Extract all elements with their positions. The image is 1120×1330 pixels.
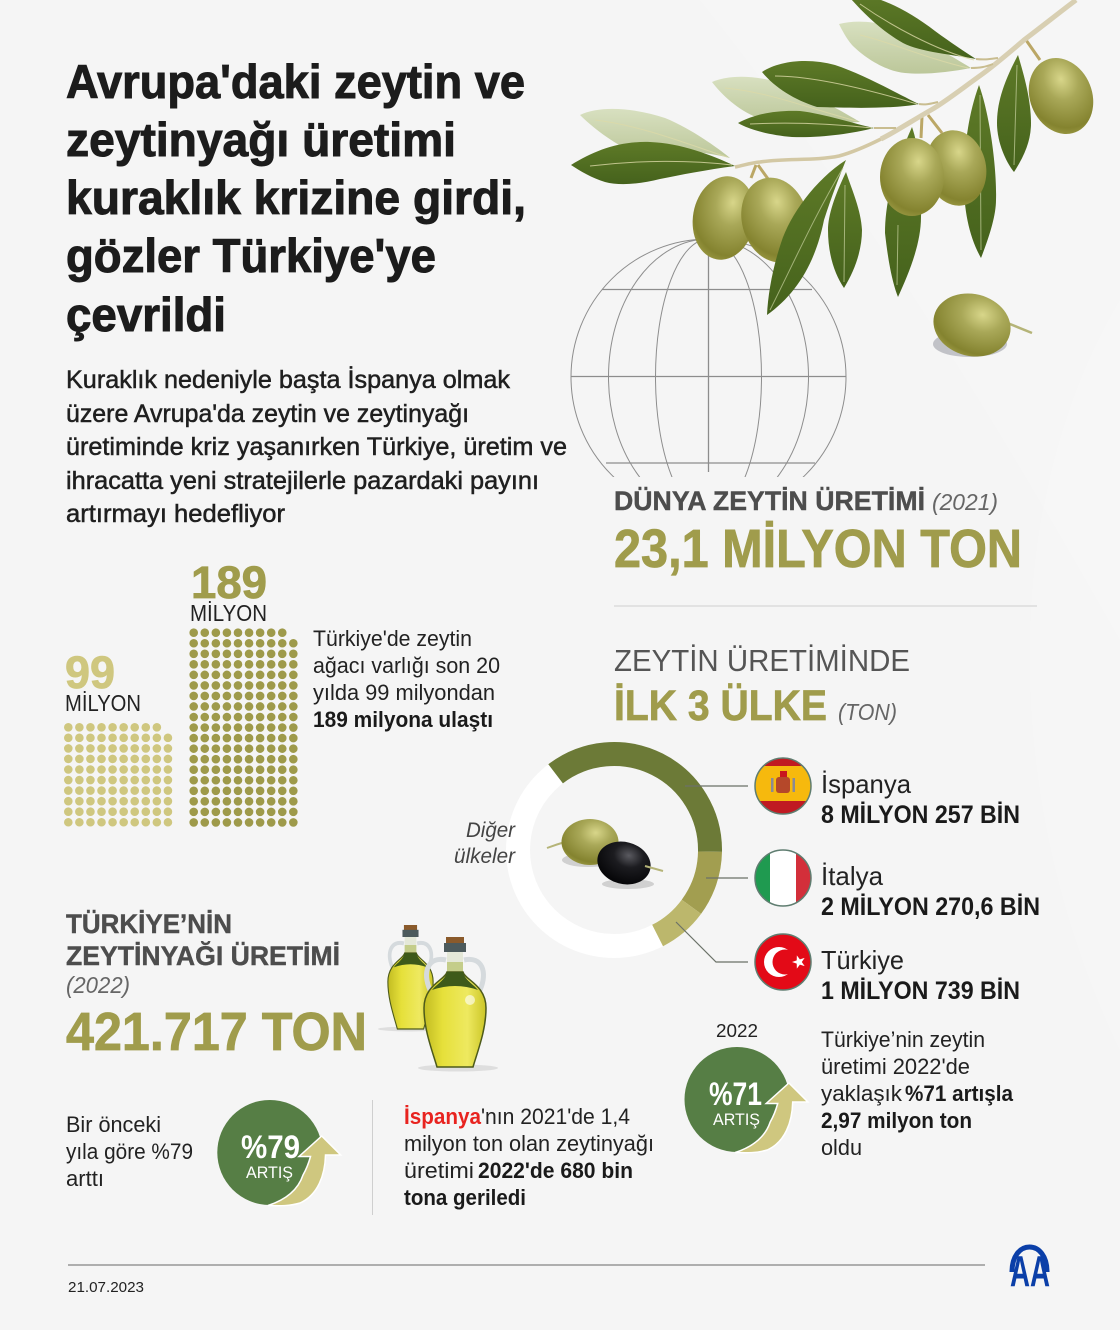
flag: Turkey — [755, 934, 811, 990]
189 million: MİLYON — [190, 600, 267, 626]
stem — [881, 0, 1076, 139]
Spain text: üretimi — [404, 1158, 474, 1183]
country values: 2 MİLYON 270,6 BİN — [821, 893, 1040, 921]
front leaves — [767, 160, 846, 315]
Turkey olive oil production: ZEYTİNYAĞI ÜRETİMİ — [66, 940, 340, 971]
oil increase text: yıla göre %79 — [66, 1139, 193, 1164]
country values: 1 MİLYON 739 BİN — [821, 977, 1020, 1005]
country values: İspanya — [821, 769, 912, 799]
Spain text: 2022'de 680 bin — [478, 1158, 633, 1183]
leaf top dark — [845, 0, 976, 59]
oil increase text: Bir önceki — [66, 1112, 161, 1137]
badge: 79 percent increase: ARTIŞ — [246, 1163, 293, 1182]
intro text: artırmayı hedefliyor — [66, 500, 285, 528]
olive branch illustration — [571, 0, 1104, 315]
badge: 79 percent increase: %79 — [241, 1129, 300, 1165]
2022 production text — [821, 1027, 1014, 1160]
country values — [821, 769, 1040, 1005]
tree count text: Türkiye'de zeytin — [313, 626, 472, 651]
99 million — [65, 647, 168, 822]
Spain text — [404, 1104, 654, 1210]
tree count text: yılda 99 milyondan — [313, 680, 495, 705]
badge: 71 percent increase — [684, 1021, 808, 1153]
segment: Spain — [556, 754, 710, 852]
leader lines — [676, 786, 748, 962]
title: Avrupa'daki zeytin ve — [66, 55, 525, 108]
date: 21.07.2023 — [68, 1279, 144, 1296]
world production: (2021) — [932, 489, 998, 515]
99 million: 99 — [65, 647, 115, 698]
top 3 countries heading: ZEYTİN ÜRETİMİNDE — [614, 643, 910, 678]
2022 production text: oldu — [821, 1135, 862, 1160]
leaf top light — [839, 22, 971, 74]
country values: Türkiye — [821, 945, 904, 975]
loose olive — [927, 285, 1032, 365]
leaf light middle — [712, 77, 860, 123]
2022 production text: %71 artışla — [905, 1081, 1014, 1106]
intro text: üretiminde kriz yaşanırken Türkiye, üretim ve — [66, 433, 567, 461]
globe wireframe — [570, 239, 846, 477]
world production: 23,1 MİLYON TON — [614, 519, 1022, 579]
Turkey olive oil production: 421.717 TON — [66, 1002, 367, 1062]
Turkey olive oil production: (2022) — [66, 972, 130, 998]
title: kuraklık krizine girdi, — [66, 171, 526, 224]
leaf midribs — [590, 4, 974, 166]
other countries label: Diğer — [466, 819, 516, 842]
back bottle — [388, 925, 433, 1029]
front bottle — [424, 937, 486, 1067]
Spain text: İspanya — [404, 1104, 482, 1129]
leaf dark middle — [762, 61, 919, 108]
logo: AA — [1010, 1247, 1050, 1296]
badge: 79 percent increase — [217, 1100, 341, 1206]
leaf left dark — [571, 142, 735, 184]
tree count text — [313, 626, 500, 732]
other countries label — [454, 819, 516, 868]
oil increase text: arttı — [66, 1166, 104, 1191]
oil increase text — [66, 1112, 193, 1191]
segment: Turkey — [658, 907, 691, 936]
top 3 countries heading: İLK 3 ÜLKE — [614, 682, 827, 730]
icon: olive oil bottles — [378, 925, 498, 1072]
country values: İtalya — [821, 861, 884, 891]
189 million — [190, 557, 294, 822]
Turkey olive oil production — [66, 909, 367, 1062]
top 3 countries heading — [614, 643, 910, 730]
Spain text: milyon ton olan zeytinyağı — [404, 1131, 654, 1156]
tree count text: 189 milyona ulaştı — [313, 707, 493, 732]
flag: Spain — [755, 758, 811, 814]
top 3 countries heading: (TON) — [838, 699, 897, 725]
leaf left light — [580, 109, 730, 158]
other countries label: ülkeler — [454, 845, 516, 868]
intro text — [66, 365, 567, 528]
logo: AA: AA — [1010, 1247, 1050, 1296]
title — [66, 55, 526, 341]
Spain text: tona geriledi — [404, 1185, 526, 1210]
country values: 8 MİLYON 257 BİN — [821, 801, 1020, 829]
intro text: Kuraklık nedeniyle başta İspanya olmak — [66, 365, 510, 394]
title: zeytinyağı üretimi — [66, 113, 456, 166]
flag: Italy — [755, 850, 811, 906]
99 million: MİLYON — [65, 690, 141, 716]
world production — [614, 486, 1022, 579]
olives on branch — [686, 171, 762, 265]
badge: 71 percent increase: %71 — [709, 1076, 762, 1112]
leaves behind olives — [885, 127, 921, 297]
donut center olives — [547, 819, 663, 890]
2022 production text: üretimi 2022'de — [821, 1054, 970, 1079]
world production: DÜNYA ZEYTİN ÜRETİMİ — [614, 486, 925, 516]
title: gözler Türkiye'ye — [66, 229, 436, 282]
intro text: ihracatta yeni stratejilerle pazardaki payını — [66, 467, 539, 495]
olive stalks — [751, 40, 1040, 183]
leaf dark small — [738, 111, 874, 137]
segment: Italy — [691, 852, 710, 907]
Spain text: 'nın 2021'de 1,4 — [481, 1104, 630, 1129]
intro text: üzere Avrupa'da zeytin ve zeytinyağı — [66, 400, 469, 428]
title: çevrildi — [66, 288, 226, 341]
2022 production text: Türkiye’nin zeytin — [821, 1027, 985, 1052]
2022 production text: 2,97 milyon ton — [821, 1108, 972, 1133]
badge: 71 percent increase: ARTIŞ — [713, 1110, 760, 1129]
tree counts dot chart — [65, 557, 294, 822]
2022 production text: yaklaşık — [821, 1081, 903, 1106]
donut chart — [518, 754, 710, 946]
189 million: 189 — [191, 557, 267, 608]
Turkey olive oil production: TÜRKİYE’NİN — [66, 909, 232, 939]
badge: 71 percent increase: 2022 — [716, 1021, 758, 1041]
tree count text: ağacı varlığı son 20 — [313, 653, 500, 678]
